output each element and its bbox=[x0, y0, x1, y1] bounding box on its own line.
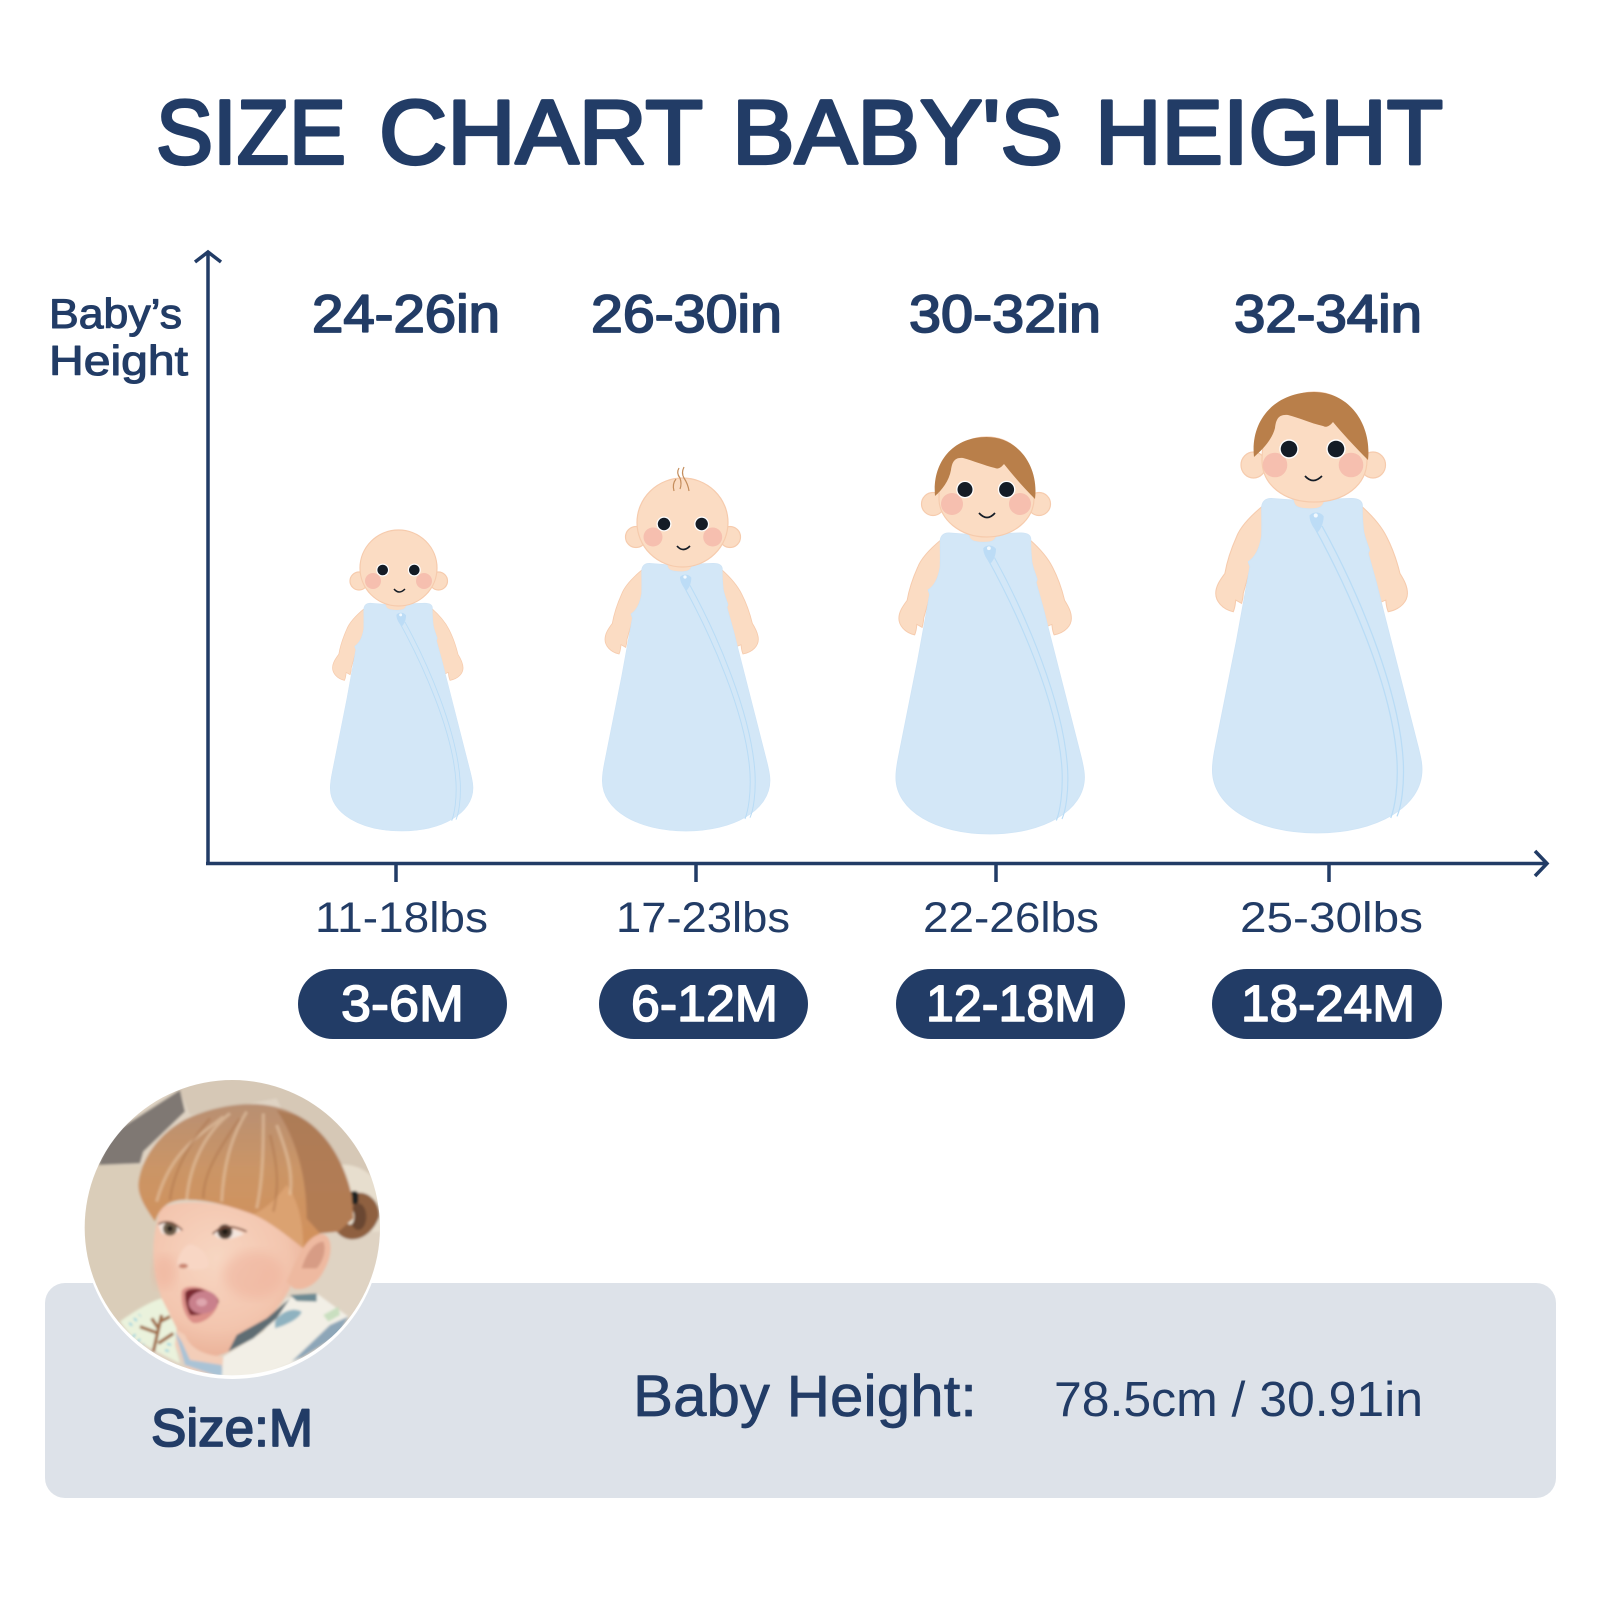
weight label 11-18lbs: 11-18lbs bbox=[315, 894, 488, 942]
age pill 12-18M: 12-18M bbox=[926, 975, 1096, 1032]
y axis arrow bbox=[195, 252, 221, 863]
age pill 3-6M bbox=[298, 969, 507, 1039]
age pill 6-12M bbox=[599, 969, 808, 1039]
baby illustration 6-12M bbox=[602, 467, 770, 831]
title bbox=[156, 83, 1443, 184]
panel: measurement example bbox=[45, 1283, 1556, 1498]
age pill 3-6M: 3-6M bbox=[341, 975, 464, 1032]
height label 26-30in: 26-30in bbox=[591, 285, 782, 344]
baby illustration 18-24M bbox=[1212, 392, 1422, 833]
baby height label: Baby Height: bbox=[633, 1364, 977, 1429]
weight label 25-30lbs: 25-30lbs bbox=[1240, 894, 1423, 942]
age pill 18-24M: 18-24M bbox=[1241, 975, 1415, 1032]
height label 32-34in: 32-34in bbox=[1234, 285, 1422, 344]
age pill 18-24M bbox=[1212, 969, 1442, 1039]
title: SIZE bbox=[156, 83, 346, 184]
baby height value: 78.5cm / 30.91in bbox=[1054, 1373, 1423, 1427]
baby illustration 3-6M bbox=[330, 530, 473, 831]
age pill 6-12M: 6-12M bbox=[631, 975, 778, 1032]
height label 30-32in: 30-32in bbox=[909, 285, 1101, 344]
x axis ticks bbox=[396, 865, 1329, 882]
size label: Size:M bbox=[151, 1399, 313, 1458]
title: HEIGHT bbox=[1095, 83, 1443, 184]
y axis label bbox=[49, 290, 188, 384]
age pill 12-18M bbox=[896, 969, 1125, 1039]
y axis label: Height bbox=[49, 337, 188, 384]
photo: toddler portrait bbox=[80, 1075, 390, 1385]
x axis arrow bbox=[206, 851, 1547, 876]
height label 24-26in: 24-26in bbox=[312, 285, 500, 344]
weight label 22-26lbs: 22-26lbs bbox=[923, 894, 1099, 942]
y axis label: Baby’s bbox=[49, 290, 182, 337]
title: CHART bbox=[379, 83, 703, 184]
title: BABY'S bbox=[732, 83, 1063, 184]
baby illustration 12-18M bbox=[896, 437, 1084, 834]
weight label 17-23lbs: 17-23lbs bbox=[616, 894, 790, 942]
